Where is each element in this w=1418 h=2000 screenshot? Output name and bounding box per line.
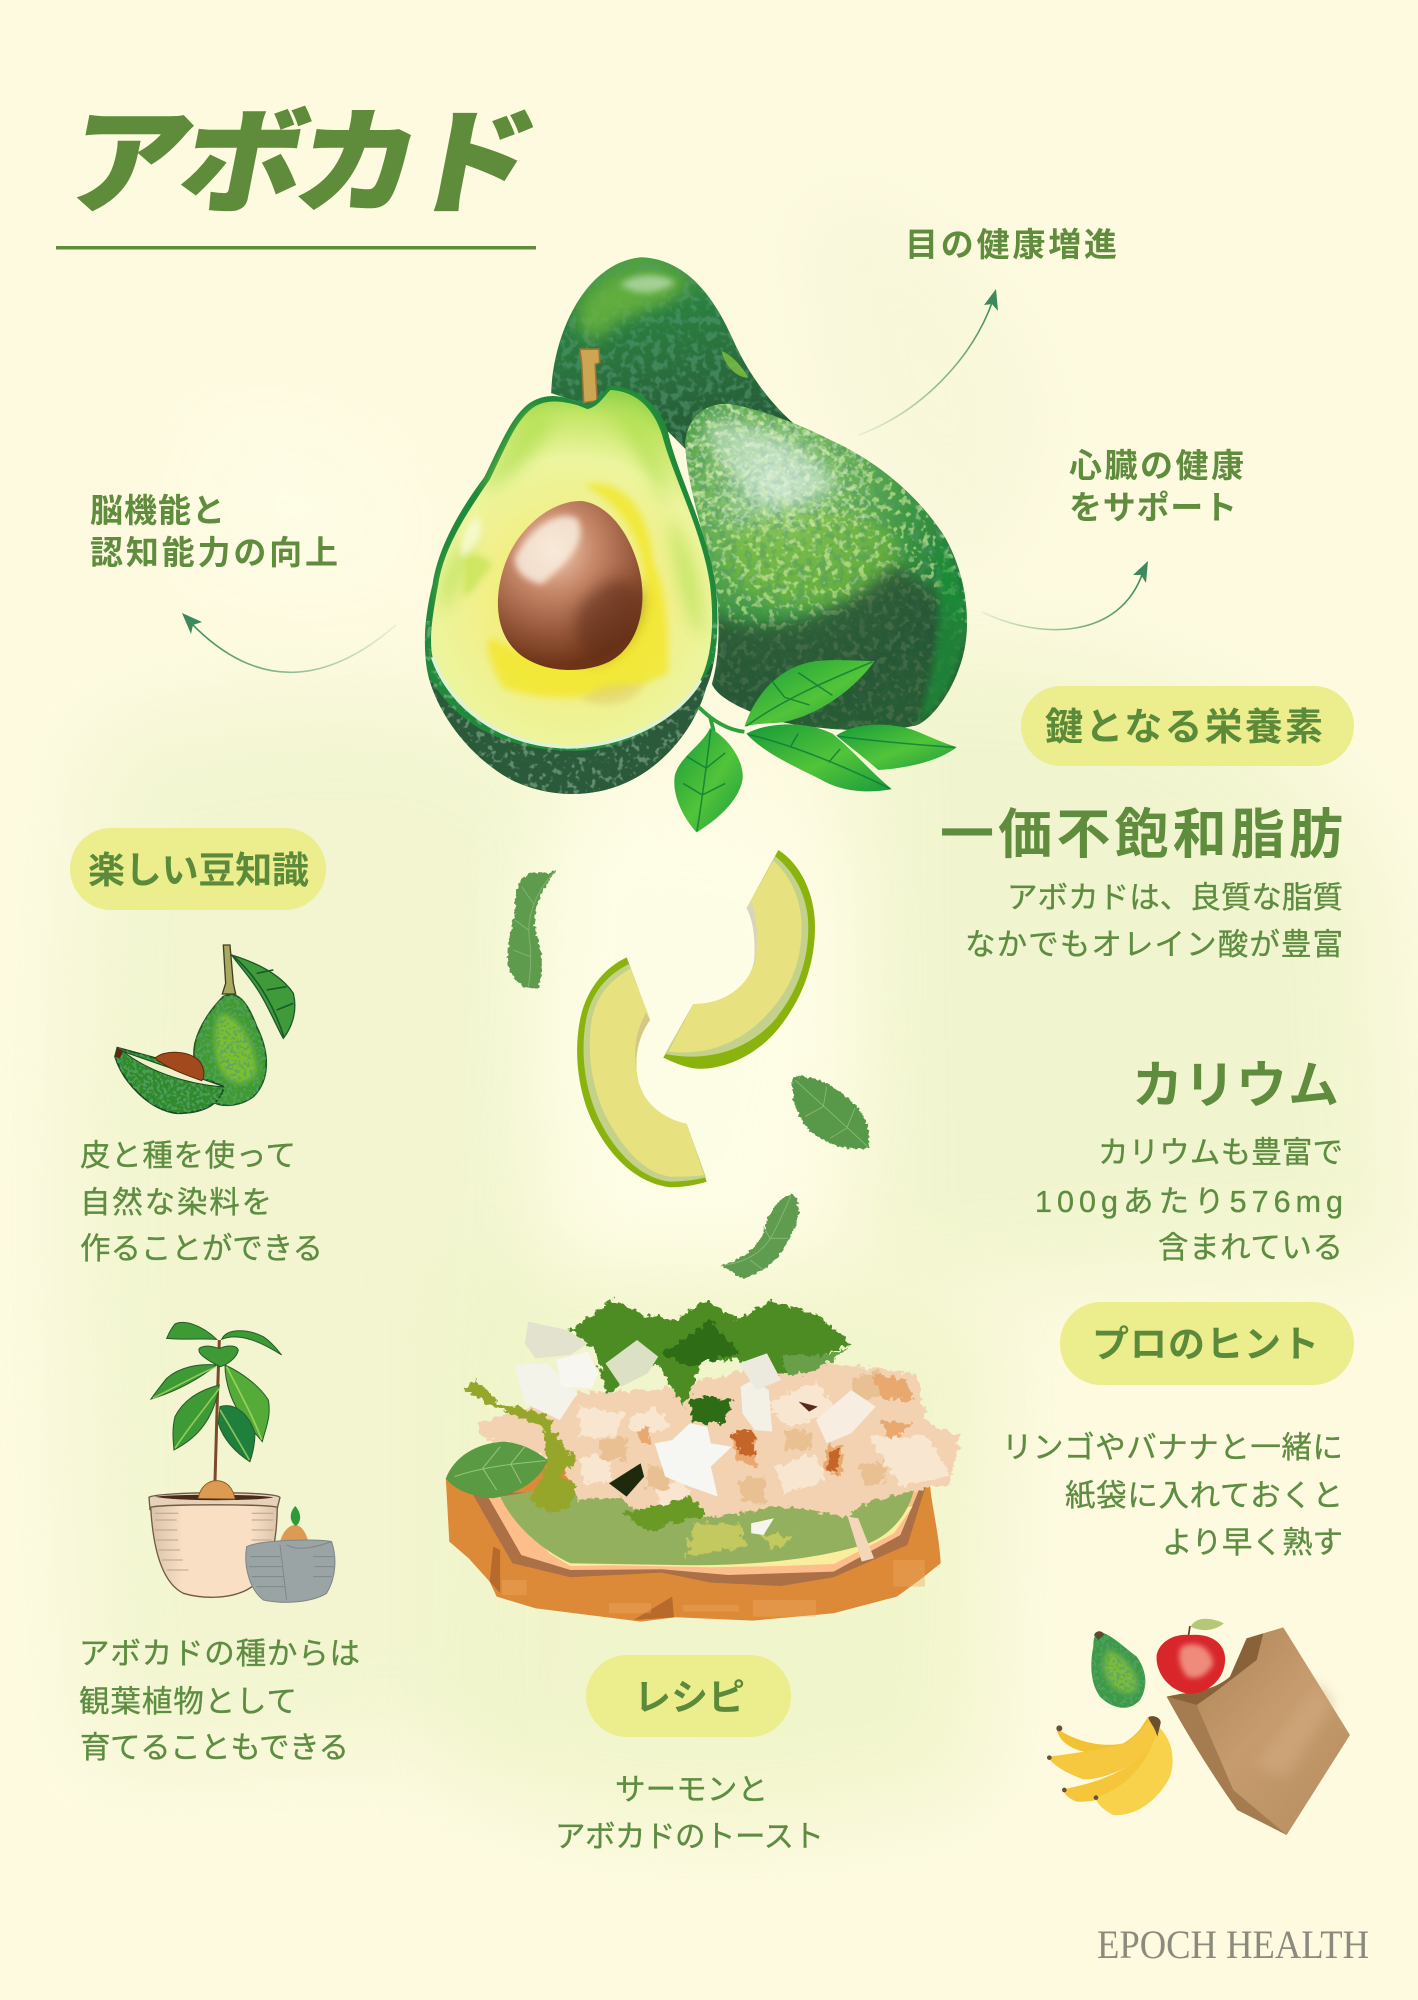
cut avocado half [415, 385, 729, 806]
text: ripening tip [1002, 1431, 1343, 1560]
nutrient: monounsaturated fat: アボカドは、良質な脂質 [1007, 881, 1343, 915]
leaf lower [720, 1194, 799, 1278]
illustration: avocado slices and falling leaves [508, 850, 869, 1278]
text: houseplant fact [79, 1637, 360, 1765]
arrow to eye health [859, 289, 998, 435]
benefit: brain function: 脳機能と [90, 492, 225, 529]
pill: recipe [586, 1655, 791, 1737]
left herb [465, 1380, 874, 1562]
icon: potted avocado plants [149, 1322, 335, 1602]
nutrient: potassium: 含まれている [1158, 1231, 1343, 1265]
text: houseplant fact: 育てることもできる [80, 1731, 349, 1765]
pill: fun facts: 楽しい豆知識 [88, 850, 309, 891]
stem of the cut avocado [580, 349, 600, 403]
arrow to heart health [982, 561, 1148, 630]
avocado seed [498, 501, 642, 670]
top greens [570, 1300, 851, 1423]
pill: pro tip: プロのヒント [1092, 1324, 1319, 1365]
white cheese chunks [514, 1322, 876, 1535]
nutrient: monounsaturated fat: なかでもオレイン酸が豊富 [965, 928, 1343, 962]
text: dye fact: 皮と種を使って [80, 1139, 296, 1173]
salmon pile [479, 1363, 960, 1517]
benefit: heart health [1069, 447, 1244, 526]
icon: avocado with leaf [110, 945, 295, 1117]
illustration: salmon and avocado toast [446, 1300, 960, 1622]
apple [1157, 1619, 1225, 1694]
leaf right [792, 1077, 869, 1149]
back whole avocado [551, 257, 794, 449]
nutrient: potassium: 100gあたり576mg [1035, 1185, 1343, 1219]
benefit: brain function [90, 492, 338, 571]
text: dye fact: 自然な染料を [80, 1186, 272, 1220]
pill: key nutrients [1021, 686, 1354, 766]
text: houseplant fact: 観葉植物として [79, 1685, 297, 1719]
guacamole [500, 1467, 914, 1565]
text: ripening tip: より早く熟す [1162, 1526, 1343, 1560]
illustration: main avocados [415, 251, 974, 832]
brand logo: EPOCH HEALTH [1097, 1922, 1369, 1967]
arrow to brain function [182, 613, 396, 672]
avocado [1091, 1631, 1146, 1708]
text: houseplant fact: アボカドの種からは [79, 1637, 360, 1671]
slice upper right [663, 850, 815, 1069]
nutrient: potassium [1035, 1057, 1343, 1265]
nutrient: monounsaturated fat [940, 805, 1343, 962]
nutrient: potassium: カリウム [1132, 1057, 1339, 1114]
benefit: heart health: をサポート [1069, 489, 1237, 526]
title: アボカド [55, 101, 546, 228]
benefit: brain function: 認知能力の向上 [90, 534, 338, 571]
text: recipe name: アボカドのトースト [555, 1820, 824, 1854]
text: dye fact: 作ることができる [80, 1232, 323, 1266]
benefit: heart health: 心臓の健康 [1069, 447, 1244, 484]
nutrient: potassium: カリウムも豊富で [1098, 1136, 1343, 1170]
text: recipe name [555, 1773, 824, 1854]
leaf upper left [508, 870, 557, 988]
text: recipe name: サーモンと [615, 1773, 768, 1807]
front right whole avocado [683, 401, 974, 738]
text: ripening tip: 紙袋に入れておくと [1065, 1479, 1343, 1513]
illustration: avocado, apple, bananas and paper bag [1047, 1619, 1350, 1835]
pill: key nutrients: 鍵となる栄養素 [1045, 707, 1323, 749]
bananas [1047, 1716, 1173, 1815]
pill: fun facts [70, 828, 326, 910]
benefit: eye health: 目の健康増進 [905, 226, 1117, 263]
pill: recipe: レシピ [634, 1677, 745, 1718]
crust bands [472, 1487, 926, 1586]
bread [446, 1440, 941, 1622]
leaves [674, 660, 957, 832]
mint leaf on toast [446, 1442, 548, 1498]
title underline [56, 246, 536, 250]
text: dye fact [80, 1139, 323, 1266]
nutrient: monounsaturated fat: 一価不飽和脂肪 [940, 805, 1343, 865]
paper bag [1167, 1627, 1350, 1835]
slice lower left [577, 957, 707, 1187]
text: ripening tip: リンゴやバナナと一緒に [1002, 1431, 1343, 1465]
pill: pro tip [1060, 1302, 1354, 1385]
